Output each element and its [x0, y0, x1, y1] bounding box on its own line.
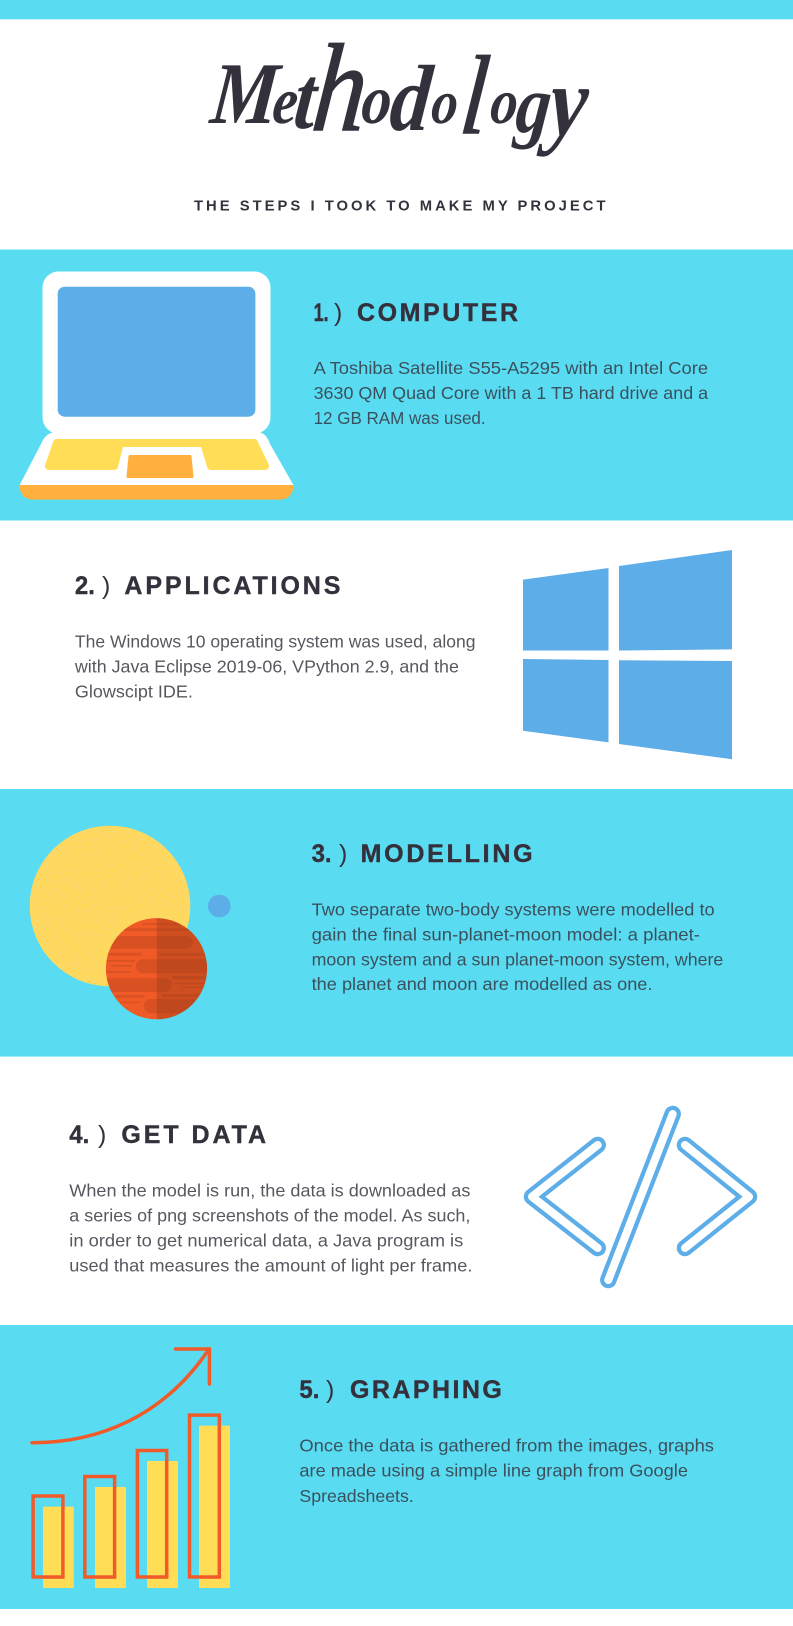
text: graphing — [299, 1436, 714, 1506]
text: graphing: Once the data is gathered from the images, graphs — [299, 1436, 714, 1456]
title: M — [205, 45, 286, 142]
text: get data — [69, 1180, 472, 1276]
text: modelling: Two separate two-body systems were modelled to — [312, 899, 715, 919]
heading: graphing: 5. — [299, 1376, 319, 1404]
heading: modelling: 3. — [312, 840, 332, 868]
text: modelling: gain the final sun-planet-moon model: a planet- — [312, 924, 700, 944]
title: h — [307, 19, 374, 158]
text: applications: The Windows 10 operating system was used, along — [75, 631, 475, 651]
heading: computer: 1. — [314, 299, 329, 327]
text: computer — [314, 358, 708, 428]
text: graphing: are made using a simple line graph from Google — [299, 1461, 688, 1481]
text: applications: Glowscipt IDE. — [75, 682, 193, 702]
text: applications — [74, 631, 476, 702]
heading: get data: GET DATA — [121, 1121, 266, 1149]
title: o — [429, 69, 462, 137]
panel: get data — [0, 1057, 793, 1325]
heading: applications: 2. — [75, 572, 95, 600]
subtitle: THE STEPS I TOOK TO MAKE MY PROJECT — [194, 198, 606, 214]
icon: laptop — [20, 272, 293, 500]
icon: sun, planet and moon — [30, 826, 231, 1021]
text: get data: a series of png screenshots of the model. As such, — [69, 1205, 470, 1225]
icon: windows logo — [523, 550, 732, 759]
yellow bars — [43, 1426, 230, 1588]
text: modelling: the planet and moon are modelled as one. — [312, 974, 652, 994]
heading: graphing: GRAPHING — [350, 1376, 502, 1404]
heading: computer: ) — [334, 299, 342, 327]
icon: code brackets — [532, 1114, 749, 1280]
heading: modelling: MODELLING — [361, 840, 533, 868]
text: computer: 3630 QM Quad Core with a 1 TB hard drive and a — [314, 383, 708, 403]
heading: get data: 4. — [69, 1121, 89, 1149]
text: get data: When the model is run, the data is downloaded as — [69, 1180, 471, 1200]
text: modelling: moon system and a sun planet-moon system, where — [312, 950, 723, 970]
title: d — [386, 46, 438, 150]
text: applications: with Java Eclipse 2019-06, VPython 2.9, and the — [74, 657, 459, 677]
heading: applications: APPLICATIONS — [124, 572, 340, 600]
title: l — [456, 33, 495, 158]
panel: modelling — [0, 789, 793, 1057]
bar chart icon — [32, 1349, 230, 1588]
arrow — [32, 1349, 209, 1443]
heading: get data: ) — [98, 1121, 106, 1149]
title: e — [270, 65, 302, 138]
title: o — [488, 66, 522, 137]
text: get data: used that measures the amount of light per frame. — [69, 1256, 472, 1276]
heading: applications: ) — [102, 572, 110, 600]
orange bar outlines — [33, 1415, 219, 1577]
panel: applications — [0, 520, 793, 789]
heading: graphing: ) — [326, 1376, 334, 1404]
text: computer: A Toshiba Satellite S55-A5295 with an Intel Core — [314, 358, 708, 378]
heading: modelling: ) — [339, 840, 347, 868]
title: g — [510, 59, 556, 150]
panel: graphing — [0, 1325, 793, 1609]
title: o — [358, 62, 396, 139]
text: get data: in order to get numerical data, a Java program is — [69, 1231, 464, 1251]
top bar — [0, 0, 793, 19]
panel: computer — [0, 250, 793, 520]
text: modelling — [312, 899, 723, 994]
title: t — [290, 48, 324, 148]
title: y — [536, 47, 594, 158]
heading: computer: COMPUTER — [357, 299, 518, 327]
text: graphing: Spreadsheets. — [299, 1486, 414, 1506]
text: computer: 12 GB RAM was used. — [314, 408, 486, 428]
